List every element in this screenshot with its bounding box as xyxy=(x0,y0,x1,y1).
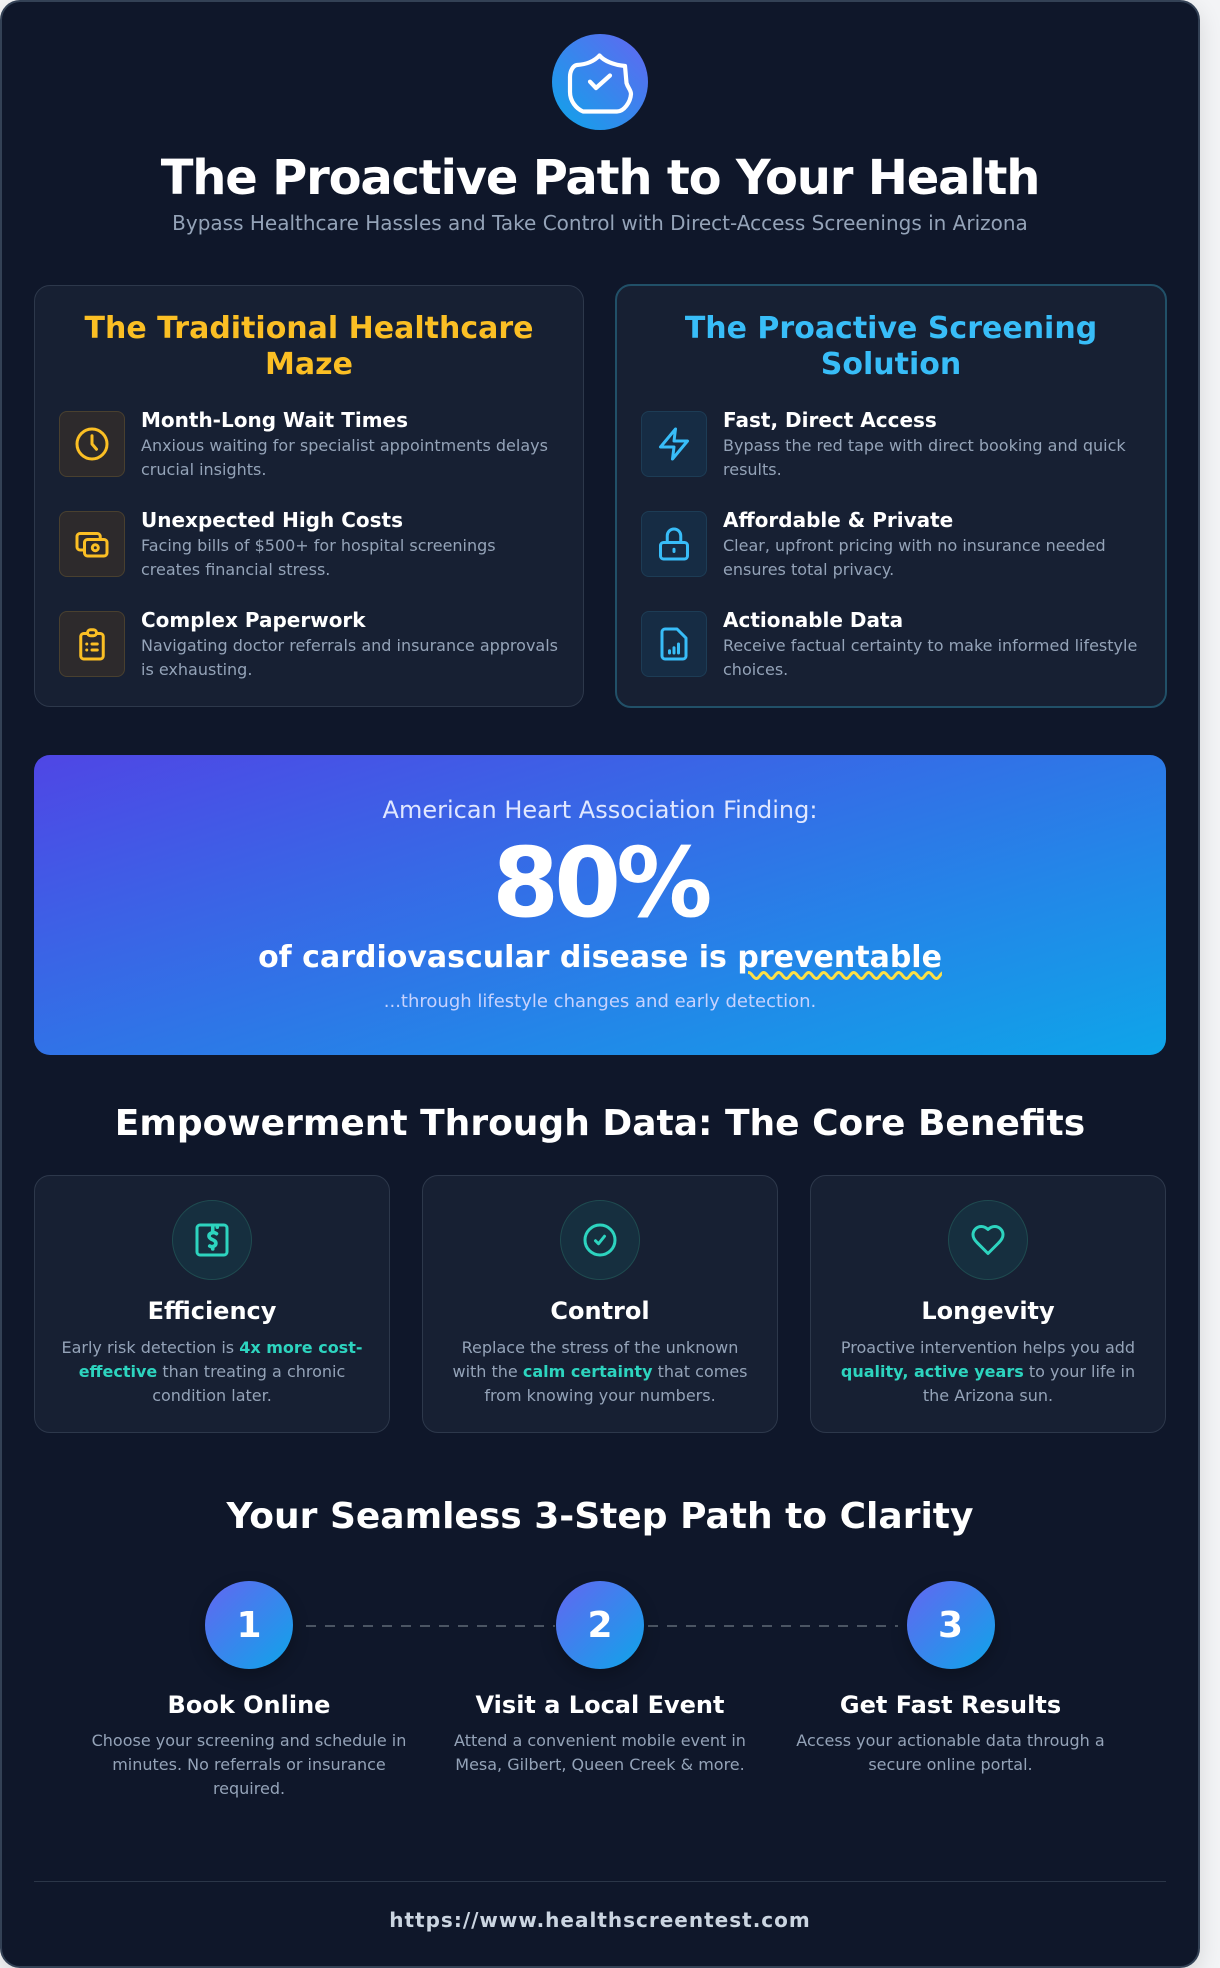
card: efficiency: condition later. xyxy=(152,1386,272,1405)
text: Book Online xyxy=(168,1691,330,1719)
item: paperwork: is exhausting. xyxy=(141,660,252,679)
subtitle: Bypass Healthcare Hassles and Take Control with Direct-Access Screenings in Arizona xyxy=(172,211,1028,235)
item: direct access xyxy=(641,408,1126,479)
item: affordable: Clear, upfront pricing with no insurance needed xyxy=(723,536,1106,555)
card: efficiency: effective than treating a chronic xyxy=(79,1362,345,1381)
step number: 2 xyxy=(587,1604,613,1646)
step 2 xyxy=(454,1581,746,1774)
text: Access your actionable data through a xyxy=(796,1731,1105,1750)
card: efficiency: Early risk detection is 4x more cost- xyxy=(61,1338,362,1357)
item: wait times: Month-Long Wait Times xyxy=(141,408,408,432)
stat text: of cardiovascular disease is preventable xyxy=(258,940,942,975)
text: Get Fast Results xyxy=(840,1691,1061,1719)
text: Visit a Local Event xyxy=(476,1691,724,1719)
step number xyxy=(906,1581,994,1669)
heading: steps: Your Seamless 3-Step Path to Clarity xyxy=(227,1496,973,1537)
step number xyxy=(205,1581,293,1669)
item: paperwork: Navigating doctor referrals and insurance approvals xyxy=(141,636,558,655)
item: wait times xyxy=(59,408,548,479)
connector 2 xyxy=(648,1625,898,1627)
text: Choose your screening and schedule in xyxy=(92,1731,406,1750)
icon: clock xyxy=(59,411,125,477)
card: efficiency: Efficiency xyxy=(148,1297,276,1325)
heading: proactive: Solution xyxy=(821,347,961,382)
heading: proactive xyxy=(685,311,1097,382)
icon: bolt xyxy=(641,411,707,477)
card: control: from knowing your numbers. xyxy=(484,1386,716,1405)
heading: proactive: The Proactive Screening xyxy=(685,311,1097,346)
step number xyxy=(556,1581,644,1669)
item: high costs: Facing bills of $500+ for hospital screenings xyxy=(141,536,496,555)
item: affordable: Affordable & Private xyxy=(723,508,953,532)
panel: proactive screening solution xyxy=(615,284,1167,708)
item: paperwork: Complex Paperwork xyxy=(141,608,366,632)
title: The Proactive Path to Your Health xyxy=(161,150,1039,206)
text: Mesa, Gilbert, Queen Creek & more. xyxy=(455,1755,745,1774)
item: wait times: Anxious waiting for specialist appointments delays xyxy=(141,436,548,455)
step number: 3 xyxy=(938,1604,963,1646)
panel: statistic xyxy=(34,755,1166,1055)
heading: traditional xyxy=(84,311,534,382)
card: longevity: the Arizona sun. xyxy=(923,1386,1053,1405)
card: control: Control xyxy=(550,1297,650,1325)
item: data: Actionable Data xyxy=(723,608,903,632)
item: wait times: crucial insights. xyxy=(141,460,266,479)
item: affordable xyxy=(641,508,1106,579)
item: high costs: Unexpected High Costs xyxy=(141,508,403,532)
item: data: Receive factual certainty to make informed lifestyle xyxy=(723,636,1137,655)
connector 1 xyxy=(306,1625,555,1627)
card: control: Replace the stress of the unknown xyxy=(462,1338,738,1357)
text: Attend a convenient mobile event in xyxy=(454,1731,746,1750)
icon: cash xyxy=(59,511,125,577)
card: control xyxy=(422,1175,778,1433)
heading: core benefits: Empowerment Through Data: The Core Benefits xyxy=(115,1103,1085,1144)
heading: traditional: The Traditional Healthcare xyxy=(84,311,534,346)
item: high costs xyxy=(59,508,496,579)
card: longevity: quality, active years to your life in xyxy=(841,1362,1135,1381)
icon: file chart xyxy=(641,611,707,677)
footer divider xyxy=(34,1881,1166,1882)
footer link: https://www.healthscreentest.com xyxy=(389,1908,811,1932)
item: paperwork xyxy=(59,608,558,679)
card: longevity: Longevity xyxy=(921,1297,1055,1325)
step 3 xyxy=(796,1581,1105,1774)
icon: clipboard xyxy=(59,611,125,677)
item: direct access: results. xyxy=(723,460,782,479)
item: high costs: creates financial stress. xyxy=(141,560,330,579)
step 1 xyxy=(92,1581,406,1798)
card: efficiency xyxy=(34,1175,390,1433)
icon: check circle xyxy=(560,1200,640,1280)
item: direct access: Bypass the red tape with direct booking and quick xyxy=(723,436,1126,455)
icon: shield logo xyxy=(552,34,648,130)
item: direct access: Fast, Direct Access xyxy=(723,408,937,432)
card: longevity xyxy=(810,1175,1166,1433)
icon: lock xyxy=(641,511,707,577)
step number: 1 xyxy=(236,1604,262,1646)
text: required. xyxy=(213,1779,285,1798)
heading: traditional: Maze xyxy=(265,347,353,382)
card: control: with the calm certainty that comes xyxy=(452,1362,748,1381)
panel: traditional healthcare maze xyxy=(34,285,584,707)
item: data: choices. xyxy=(723,660,788,679)
card: longevity: Proactive intervention helps you add xyxy=(841,1338,1135,1357)
icon: heart xyxy=(948,1200,1028,1280)
item: data xyxy=(641,608,1137,679)
item: affordable: ensures total privacy. xyxy=(723,560,894,579)
stat note: ...through lifestyle changes and early detection. xyxy=(384,991,816,1012)
icon: dollar xyxy=(172,1200,252,1280)
text: minutes. No referrals or insurance xyxy=(112,1755,386,1774)
text: secure online portal. xyxy=(868,1755,1033,1774)
stat number: 80% xyxy=(492,827,708,939)
stat source: American Heart Association Finding: xyxy=(383,796,817,824)
